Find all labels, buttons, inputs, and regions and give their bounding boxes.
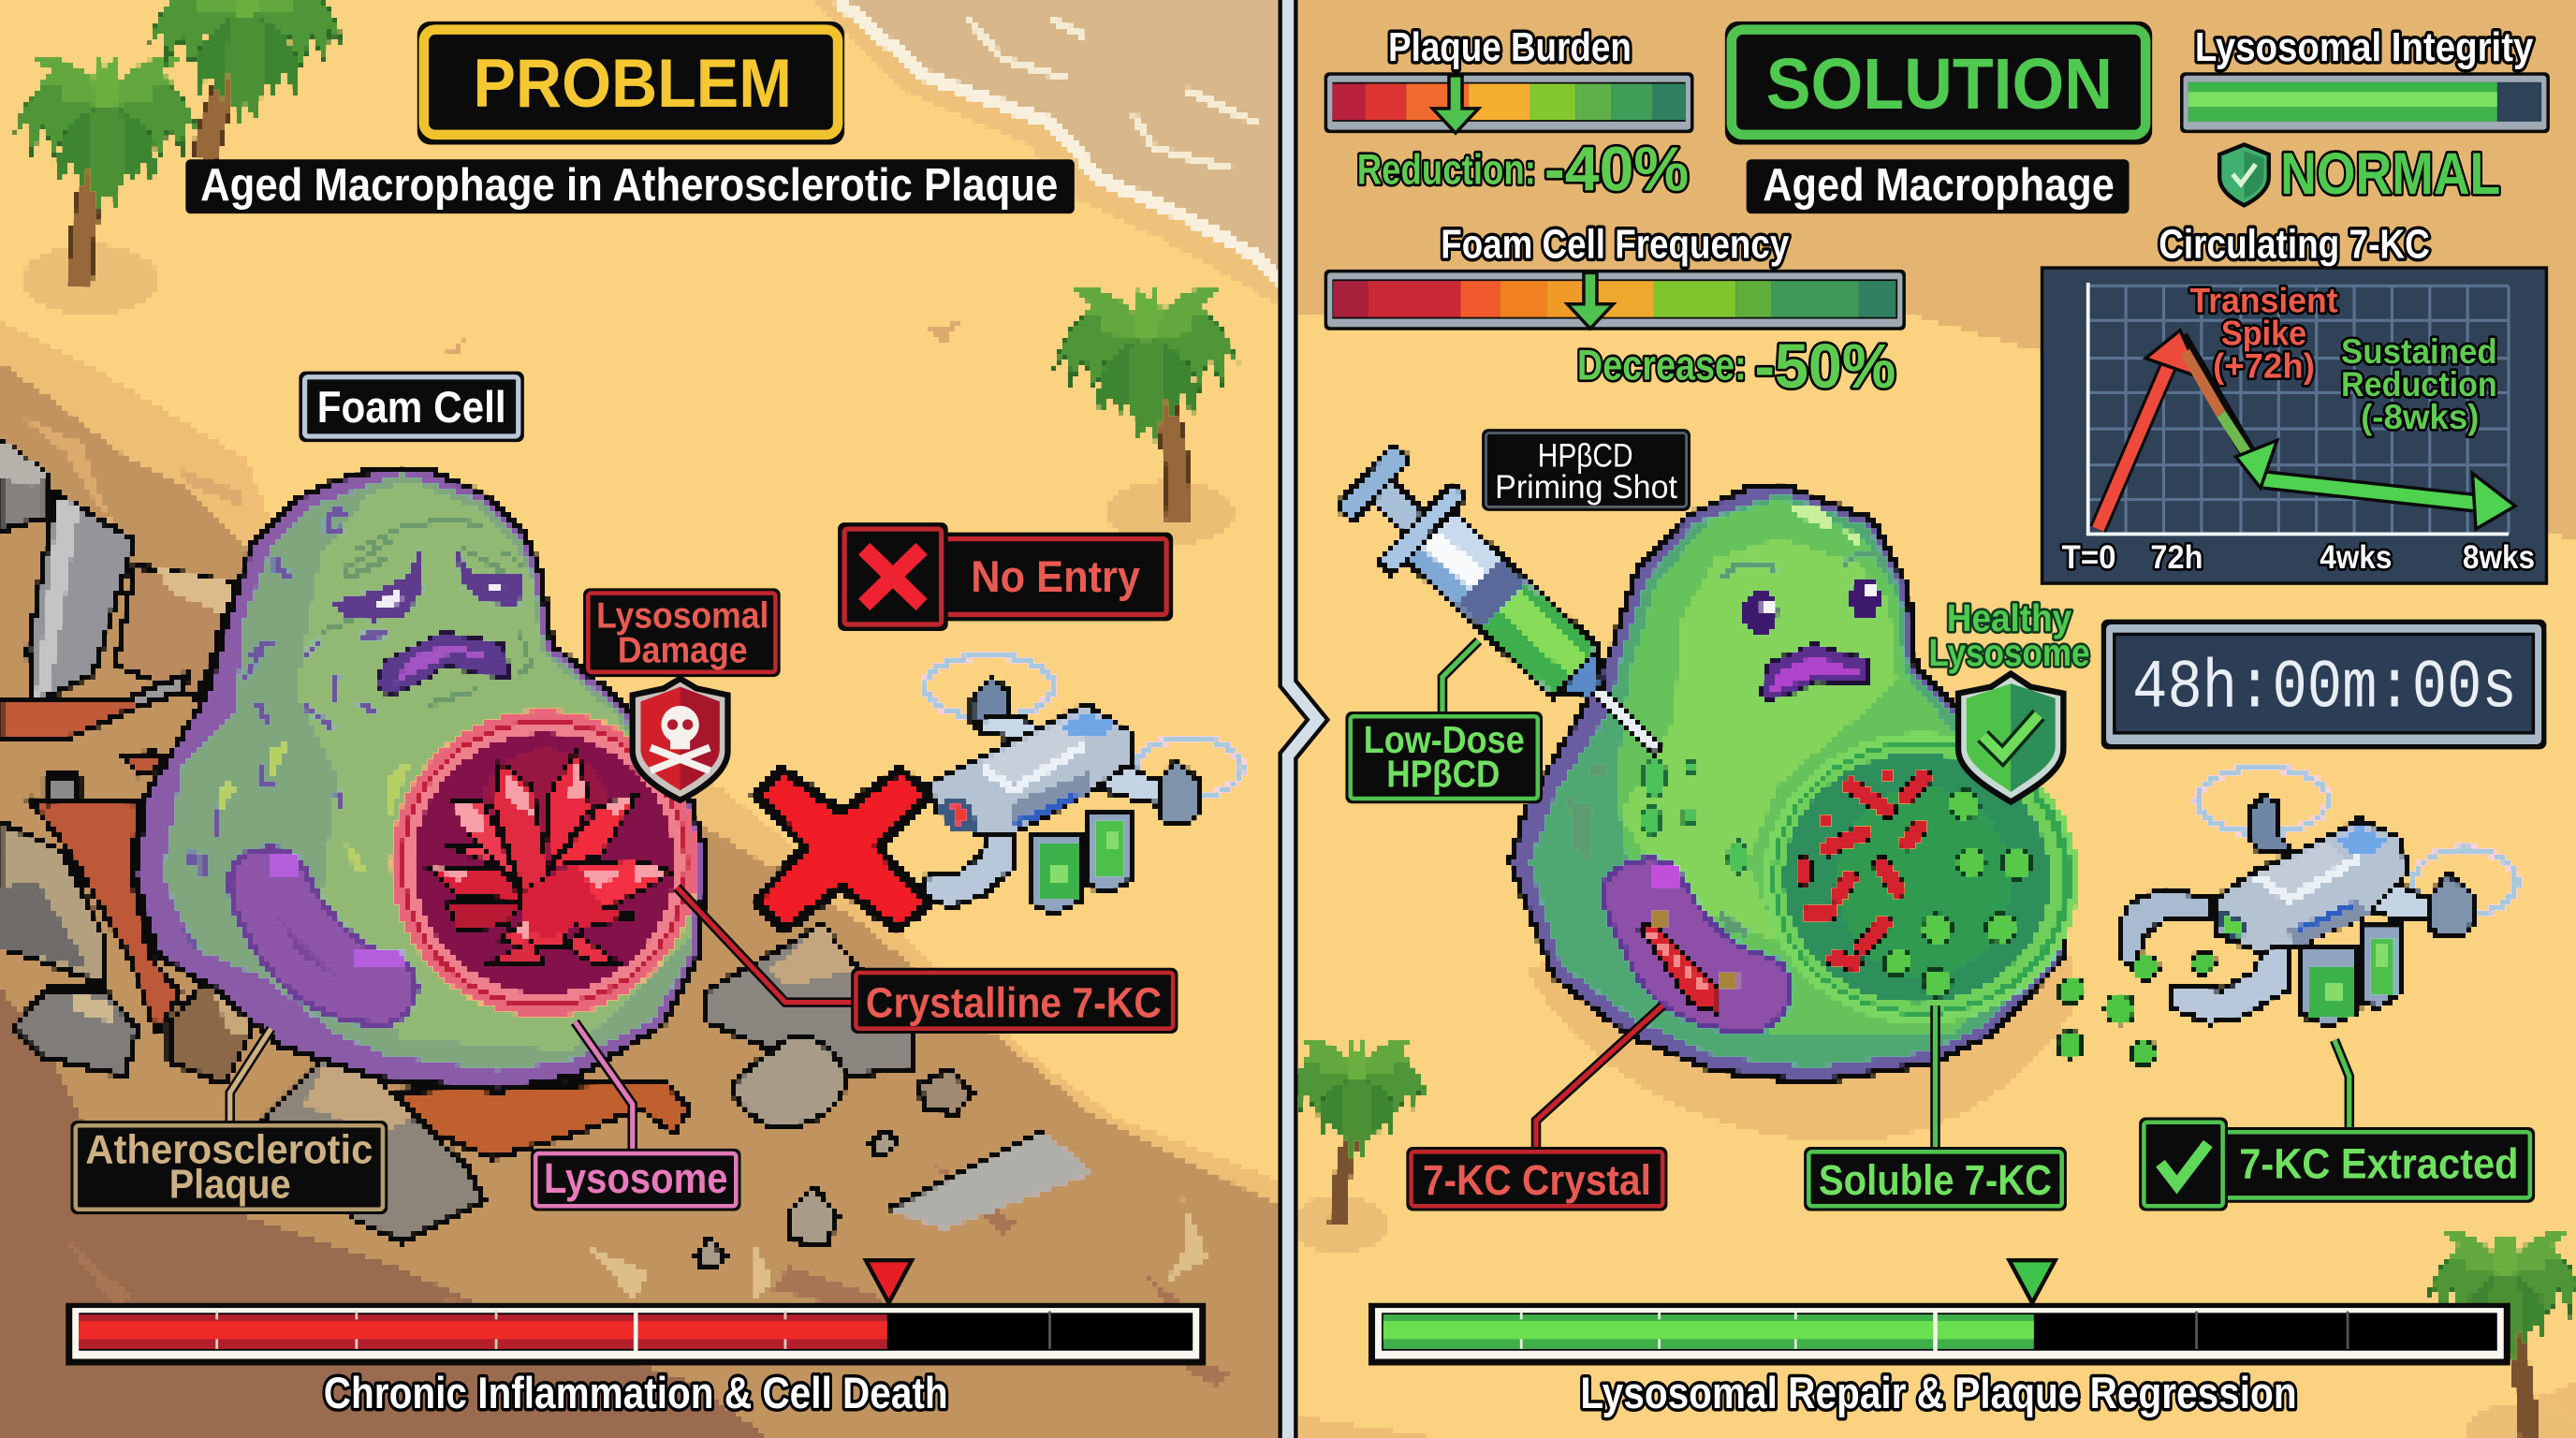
label: Healthy Lysosome: Healthy [1947, 596, 2072, 639]
chart: circulating 7-KC: Spike [2221, 315, 2306, 353]
chart: circulating 7-KC: (-8wks) [2361, 398, 2479, 436]
palm tree 1 [15, 52, 198, 315]
title: SOLUTION: SOLUTION [1766, 44, 2113, 125]
drone: blocked [924, 655, 1242, 915]
heading: Lysosomal Integrity: Lysosomal Integrity [2195, 24, 2534, 70]
leader: 7-KC crystal [1536, 1005, 1662, 1151]
label: Atherosclerotic Plaque: Plaque [169, 1161, 291, 1207]
callout: 7-KC Extracted: 7-KC Extracted [2239, 1139, 2519, 1187]
palm tree 5 [2427, 1228, 2576, 1438]
chart: circulating 7-KC: 72h [2150, 539, 2203, 576]
caption: lysosomal repair: Lysosomal Repair & Plaque Regression [1580, 1369, 2297, 1418]
metric: plaque reduction: -40% [1544, 136, 1689, 205]
palm tree 3 [1055, 285, 1238, 546]
heading: Foam Cell Frequency: Foam Cell Frequency [1441, 222, 1790, 268]
metric: foam cell decrease [1577, 332, 1895, 402]
status: NORMAL [2219, 141, 2500, 207]
subtitle: solution: Aged Macrophage [1763, 160, 2115, 211]
countdown timer [2101, 620, 2546, 749]
syringe [1327, 435, 1697, 790]
chart: circulating 7-KC: 8wks [2463, 539, 2535, 576]
healthy cell: nucleus with crystal [1604, 859, 1792, 1031]
metric: foam cell decrease: -50% [1754, 332, 1895, 402]
label: Crystalline 7-KC [851, 968, 1178, 1034]
label: Foam Cell: Foam Cell [317, 383, 506, 433]
metric: plaque reduction: Reduction: [1357, 146, 1536, 194]
label: Crystalline 7-KC: Crystalline 7-KC [866, 978, 1162, 1026]
label: Soluble 7-KC: Soluble 7-KC [1819, 1156, 2052, 1204]
foam cell: sad face [329, 547, 522, 695]
heading: Plaque Burden: Plaque Burden [1388, 24, 1632, 70]
label: Low-Dose HPβCD: HPβCD [1386, 753, 1500, 796]
chart: circulating 7-KC: Sustained [2341, 332, 2497, 371]
progress marker: solution [2009, 1260, 2056, 1303]
icon: red shield with skull and crossbones [633, 679, 728, 800]
label: Soluble 7-KC [1804, 1147, 2067, 1211]
title: SOLUTION [1725, 22, 2152, 144]
label: Healthy Lysosome: Lysosome [1928, 631, 2089, 674]
icon: big red X [755, 769, 929, 930]
label: Lysosomal Damage [583, 588, 781, 677]
chart: circulating 7-KC [2042, 268, 2546, 583]
label: Low-Dose HPβCD: Low-Dose [1364, 718, 1525, 761]
label: HPβCD Priming Shot: Priming Shot [1495, 469, 1677, 506]
icon: green shield with check [1958, 674, 2063, 801]
panel: solution background [1288, 0, 2576, 1438]
label: Lysosome [531, 1149, 741, 1211]
green droplets [1641, 757, 1748, 874]
chart: circulating 7-KC: (+72h) [2213, 347, 2315, 386]
heading: Circulating 7-KC: Circulating 7-KC [2159, 222, 2430, 268]
gauge: foam cell frequency [1325, 270, 1906, 330]
foam cell: aged macrophage body [134, 468, 707, 1091]
status: NORMAL: NORMAL [2280, 141, 2500, 207]
caption: chronic inflammation: Chronic Inflammation & Cell Death [324, 1369, 948, 1418]
label: Lysosome: Lysosome [544, 1154, 728, 1202]
label: 7-KC Crystal: 7-KC Crystal [1423, 1156, 1651, 1204]
healthy cell: body [1510, 484, 2077, 1083]
chart: circulating 7-KC: 4wks [2320, 539, 2392, 576]
leader: crystalline 7-KC [677, 888, 855, 1003]
gauge: plaque burden [1325, 72, 1694, 133]
gauge: lysosomal integrity [2180, 72, 2550, 133]
healthy lysosome [1764, 733, 2079, 1023]
progress bar: lysosomal repair [1370, 1305, 2509, 1364]
panel: problem background [0, 0, 1288, 1438]
label: Low-Dose HPβCD [1345, 712, 1543, 803]
callout: No Entry [838, 522, 1173, 631]
progress marker: problem [866, 1260, 912, 1303]
palm tree 2 [150, 0, 343, 161]
leader: atherosclerotic plaque [230, 1029, 271, 1123]
foam cell: nucleus [230, 849, 416, 1024]
chart: circulating 7-KC: Transient [2190, 281, 2338, 319]
lysosome with crystalline 7-KC [390, 710, 697, 1017]
metric: plaque reduction [1357, 136, 1689, 205]
subtitle: problem: Aged Macrophage in Atherosclerotic Plaque [200, 160, 1058, 211]
released 7-KC particles [2056, 977, 2157, 1066]
palm tree 4 [1285, 1035, 1428, 1254]
label: Foam Cell [299, 372, 524, 442]
leader: soluble 7-KC [1933, 1005, 1939, 1151]
countdown timer: 48h:00m:00s [2132, 651, 2517, 728]
progress bar: chronic inflammation [67, 1305, 1204, 1364]
leader: lysosome [575, 1022, 633, 1151]
drone: extracting 7-KC [2119, 768, 2517, 1027]
label: Lysosomal Damage: Lysosomal [596, 595, 768, 636]
title: PROBLEM [417, 22, 844, 144]
label: 7-KC Crystal [1406, 1147, 1667, 1211]
callout: No Entry: No Entry [971, 552, 1141, 602]
chart: circulating 7-KC: T=0 [2062, 539, 2116, 576]
healthy cell: face [1723, 553, 1886, 701]
label: Lysosomal Damage: Damage [618, 630, 748, 670]
label: HPβCD Priming Shot: HPβCD [1538, 437, 1633, 474]
callout: 7-KC Extracted [2139, 1117, 2535, 1211]
divider [1288, 0, 1318, 1438]
title: PROBLEM: PROBLEM [473, 44, 792, 122]
chart: circulating 7-KC: Reduction [2341, 365, 2497, 404]
label: HPβCD Priming Shot [1482, 429, 1690, 511]
label: Atherosclerotic Plaque: Atherosclerotic [85, 1127, 373, 1173]
leader: low-dose [1442, 640, 1479, 716]
leader: 7-KC extracted [2334, 1040, 2349, 1134]
metric: foam cell decrease: Decrease: [1577, 341, 1747, 389]
rocks: plaque debris [0, 440, 1092, 1265]
label: Atherosclerotic Plaque [70, 1121, 388, 1214]
label: Healthy Lysosome [1928, 596, 2089, 674]
